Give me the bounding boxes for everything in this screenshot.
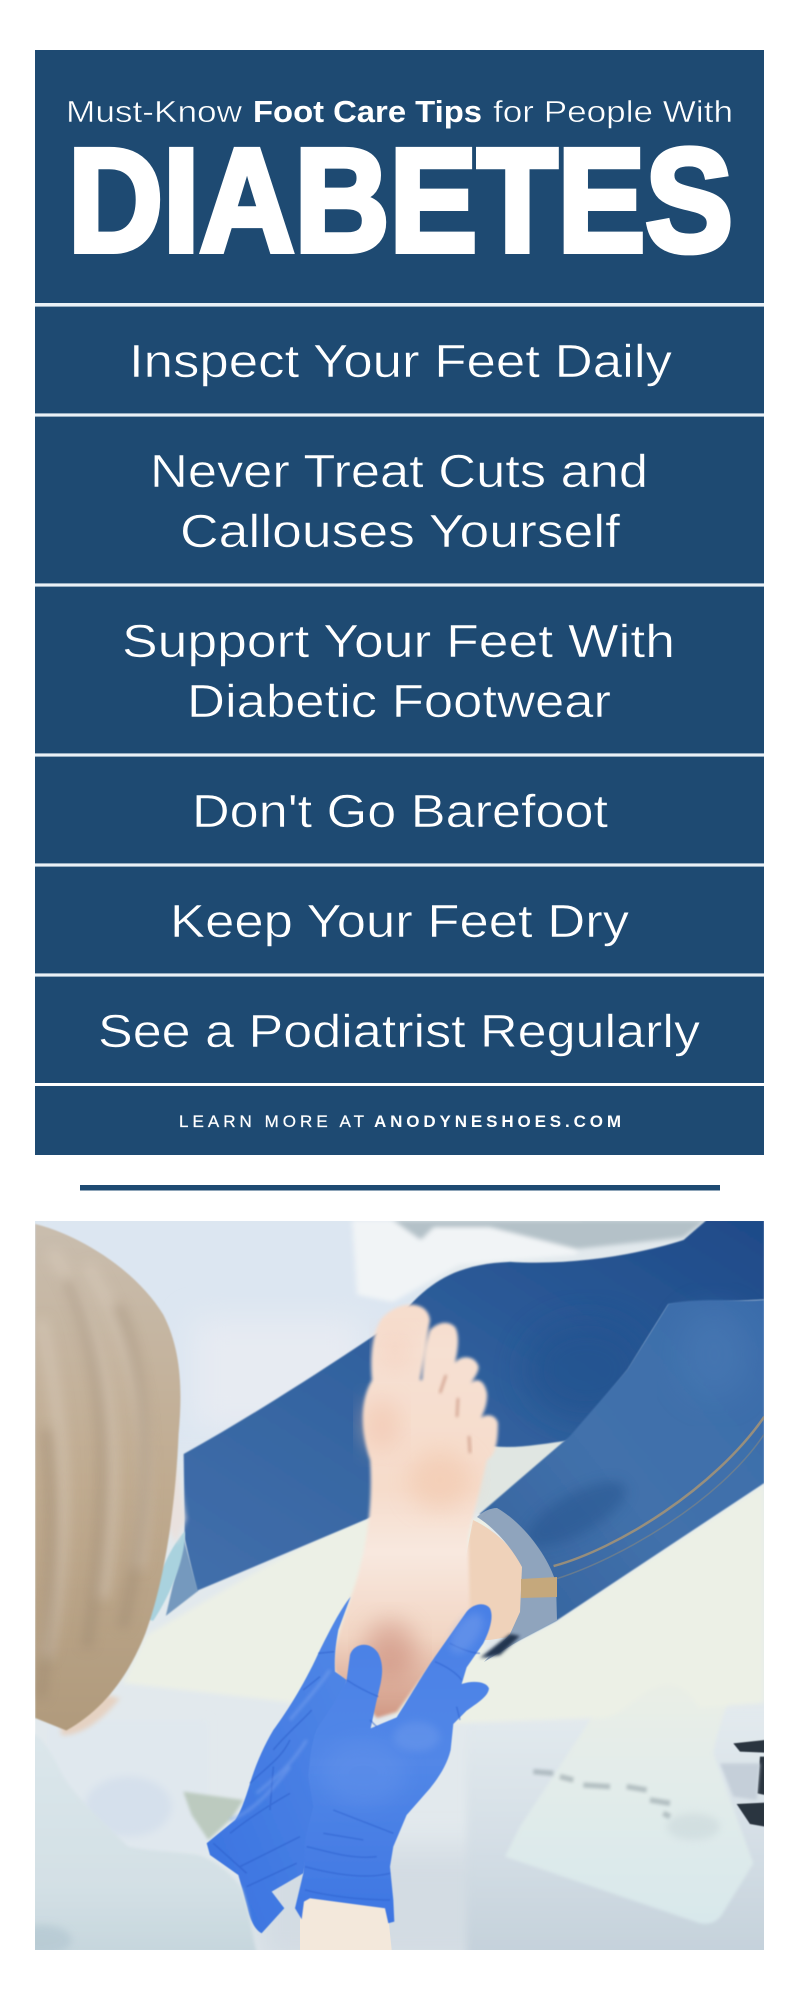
glove: front hand xyxy=(295,1604,492,1923)
divider rule xyxy=(80,1185,720,1190)
jeans xyxy=(166,1220,764,1658)
face mask xyxy=(150,1532,186,1622)
hair xyxy=(35,1224,180,1730)
face mask, skin and hair xyxy=(35,1224,186,1735)
table edge, dark base and translucent paper sheet xyxy=(466,1739,764,1950)
subtitle: for People With xyxy=(493,94,733,129)
jeans: far leg xyxy=(184,1220,764,1591)
foot sole xyxy=(333,1305,498,1718)
wrist xyxy=(300,1898,392,1950)
separator lines xyxy=(35,303,764,1083)
jeans: near leg xyxy=(480,1300,764,1658)
panel: tip 6 xyxy=(35,977,764,1083)
subtitle xyxy=(66,94,733,129)
panel: tip 4: Don't Go Barefoot xyxy=(192,785,608,837)
photo: podiatrist examining a foot xyxy=(35,1221,764,1950)
paper sheet xyxy=(506,1788,752,1924)
title: DIABETES: DIABETES xyxy=(68,119,733,283)
panel: tip 4 xyxy=(35,757,764,863)
table top xyxy=(122,1484,764,1723)
cuff label xyxy=(521,1577,557,1598)
panel: tip 3: Support Your Feet With xyxy=(122,615,675,667)
jeans: rolled cuff xyxy=(477,1508,557,1662)
subtitle: Must-Know xyxy=(66,94,243,129)
panel: tip 5 xyxy=(35,867,764,973)
panel: tip 2: Never Treat Cuts and xyxy=(150,445,648,497)
coat xyxy=(35,1734,256,1950)
panel: tip 3: Diabetic Footwear xyxy=(187,675,611,727)
subtitle: Foot Care Tips xyxy=(253,94,482,129)
panel: tip 1 xyxy=(35,307,764,413)
area under the table xyxy=(86,1778,244,1840)
cuff shadow xyxy=(480,1634,520,1658)
panel: tip 5: Keep Your Feet Dry xyxy=(170,895,629,947)
jeans: stitching xyxy=(554,1417,764,1566)
panel: footer call to action: ANODYNESHOES.COM xyxy=(374,1112,621,1131)
panel: footer call to action xyxy=(35,1086,764,1155)
panel: tip 1: Inspect Your Feet Daily xyxy=(129,335,672,387)
ankle xyxy=(467,1520,522,1640)
panel: tip 2: Callouses Yourself xyxy=(180,505,620,557)
glove: back hand xyxy=(207,1597,351,1933)
panel: header xyxy=(35,50,764,303)
panel: footer call to action: LEARN MORE AT xyxy=(179,1112,364,1131)
photo background and table xyxy=(20,1200,764,1967)
panel: tip 3 xyxy=(35,587,764,753)
panel: tip 6: See a Podiatrist Regularly xyxy=(98,1005,700,1057)
panel: tip 2 xyxy=(35,417,764,583)
